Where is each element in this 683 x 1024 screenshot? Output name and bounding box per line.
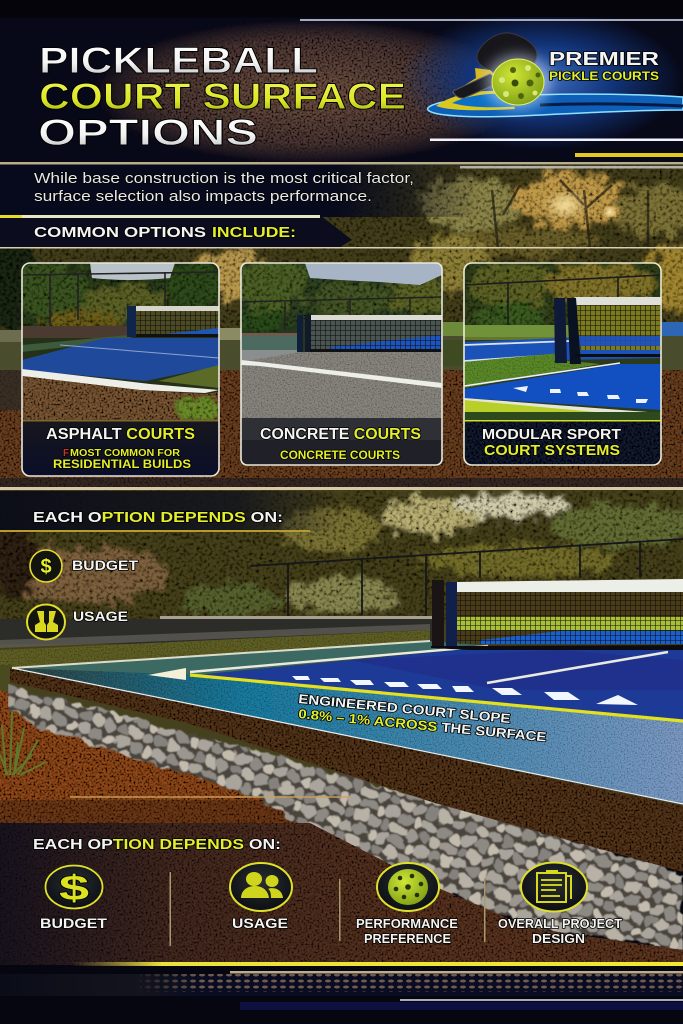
label: overall project design: OVERALL PROJECT: [498, 917, 622, 931]
logo: Premier Pickle Courts: [428, 33, 683, 117]
icon: budget small: [30, 550, 62, 582]
heading: each option depends on (upper): [0, 491, 340, 532]
label: performance preference: PREFERENCE: [364, 932, 451, 946]
heading: common options include: [0, 215, 683, 248]
label: asphalt courts: RESIDENTIAL BUILDS: [53, 459, 191, 471]
fence: [250, 539, 683, 618]
label: usage small: USAGE: [73, 608, 128, 624]
panel: header: [0, 0, 683, 165]
soil: [0, 690, 300, 830]
icon: usage small: [27, 604, 65, 640]
label: budget: BUDGET: [40, 915, 107, 931]
footer stripes: [0, 962, 683, 1024]
icon: performance pickleball: [377, 863, 439, 911]
text: intro band: surface selection also impacts performance.: [34, 188, 372, 205]
label: asphalt courts: MOST COMMON FOR: [70, 447, 180, 459]
text: engineered court slope: ENGINEERED COURT SLOPE: [298, 691, 512, 726]
panel: tree photo band: [0, 165, 683, 490]
divider: [484, 878, 486, 942]
icon: clipboard: [521, 862, 587, 912]
logo: Premier Pickle Courts: PREMIER: [549, 49, 659, 69]
watermark line: [70, 796, 350, 798]
heading: each option depends on: EACH OP TION DEPENDS ON:: [33, 837, 281, 853]
grass tuft: [0, 712, 46, 775]
title: OPTIONS: [38, 112, 258, 153]
slope arrow: [148, 668, 638, 705]
teal apron: [12, 641, 490, 675]
yellow slope line: [190, 675, 683, 721]
label: concrete courts: CONCRETE COURTS: [260, 426, 421, 443]
heading: common options include: INCLUDE:: [212, 225, 296, 241]
panel: asphalt courts card: [14, 260, 225, 476]
panel: each option depends on (lower): [0, 823, 683, 965]
label: modular sport court systems: MODULAR SPORT: [482, 426, 621, 443]
icon: pickleball: [485, 54, 551, 110]
net: [431, 579, 683, 650]
label: usage: USAGE: [232, 915, 288, 931]
text: intro band: While base construction is the most critical factor,: [34, 170, 414, 187]
icon: budget small: $: [40, 556, 52, 578]
panel: concrete courts card: [234, 255, 450, 465]
label: modular sport court systems: [482, 426, 621, 459]
logo: Premier Pickle Courts: PICKLE COURTS: [549, 71, 659, 83]
icon: budget: [46, 866, 102, 908]
asphalt base layer: [10, 668, 683, 872]
trunks: [492, 180, 648, 248]
text: engineered court slope: [298, 691, 547, 744]
label: overall project design: DESIGN: [532, 932, 585, 946]
title: [38, 40, 406, 153]
label: performance preference: [356, 917, 458, 946]
text: intro band: [0, 165, 683, 217]
gravel layer: [8, 684, 683, 950]
divider: [170, 872, 171, 946]
text: engineered court slope: 0.8% – 1% ACROSS THE SURFACE: [298, 706, 547, 744]
panel: court slope cross section photo: [0, 487, 683, 950]
heading: each option depends on (upper): EACH O PTION DEPENDS ON:: [33, 509, 283, 526]
label: concrete courts: [260, 426, 421, 462]
heading: common options include: COMMON OPTIONS: [34, 225, 206, 241]
label: concrete courts: CONCRETE COURTS: [280, 450, 400, 462]
label: modular sport court systems: COURT SYSTEMS: [484, 442, 620, 459]
label: overall project design: [498, 917, 622, 946]
blue playing area: [196, 647, 683, 721]
label: performance preference: PERFORMANCE: [356, 917, 458, 931]
label: budget small: BUDGET: [72, 557, 138, 573]
label: asphalt courts: ASPHALT COURTS: [46, 426, 195, 443]
icon: usage: [230, 863, 292, 911]
icon: budget: $: [59, 869, 89, 908]
panel: modular sport court systems card: [464, 261, 661, 465]
icon: swoosh: [428, 91, 683, 117]
divider: [339, 879, 340, 941]
label: asphalt courts: F: [63, 448, 69, 459]
court surface slab: [12, 668, 683, 804]
title: COURT SURFACE: [39, 76, 406, 117]
title: PICKLEBALL: [39, 40, 318, 81]
label: asphalt courts: [46, 426, 195, 471]
icon: paddle: [452, 33, 537, 98]
